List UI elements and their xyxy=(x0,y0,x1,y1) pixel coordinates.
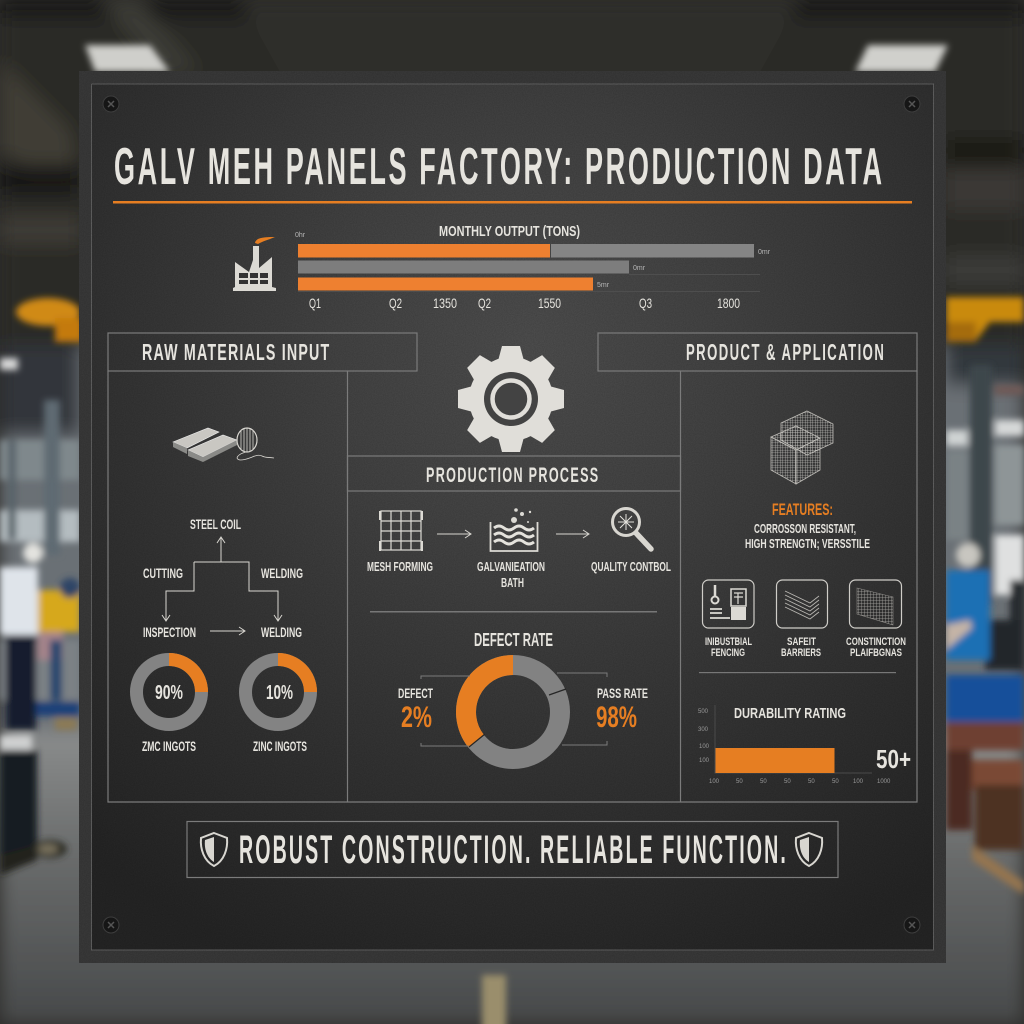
panel frames xyxy=(108,333,917,802)
axis labels: 1800 xyxy=(717,295,740,311)
divider xyxy=(699,672,896,673)
banner xyxy=(187,822,838,878)
center panel: process xyxy=(367,508,671,759)
y axis labels: 100 xyxy=(699,758,710,764)
axis labels: 1350 xyxy=(433,295,457,311)
axis labels: Q3 xyxy=(639,295,652,311)
heading: durability rating: DURABILITY RATING xyxy=(734,705,846,722)
heading: raw materials: RAW MATERIALS INPUT xyxy=(142,341,329,366)
x axis labels: 50 xyxy=(832,779,839,785)
y axis labels: 100 xyxy=(699,744,710,750)
donut: 90% xyxy=(136,660,202,724)
icon: shield right xyxy=(796,833,822,866)
y axis labels: 300 xyxy=(698,727,709,733)
label: safety barriers xyxy=(781,636,821,659)
bar 2 xyxy=(298,260,629,274)
label: construction platforms: PLAIFBGNAS xyxy=(850,647,902,659)
label: construction platforms: CONSTINCTION xyxy=(846,636,906,648)
label: welding upper: WELDING xyxy=(261,565,303,581)
label: safety barriers: SAFEIT xyxy=(787,636,816,648)
icon: mesh cubes xyxy=(771,411,833,484)
callout lines xyxy=(421,673,607,746)
icon: industrial fencing xyxy=(702,580,754,628)
icon: shield left xyxy=(201,833,227,866)
right side scene xyxy=(946,297,1024,342)
bar 3 xyxy=(298,278,593,290)
label: galvanization bath: BATH xyxy=(501,575,524,590)
x axis labels: 100 xyxy=(853,779,864,785)
tiny labels: 0hr xyxy=(295,232,306,239)
label: quality control: QUALITY CONTBOL xyxy=(591,559,671,574)
x axis labels: 100 xyxy=(709,779,720,785)
label: steel coil: STEEL COIL xyxy=(190,516,241,532)
axis labels: Q2 xyxy=(478,295,491,311)
y axis labels xyxy=(698,709,710,764)
axis labels: Q1 xyxy=(309,295,321,311)
label: galvanization bath xyxy=(477,559,545,590)
title: GALV MEH PANELS FACTORY: PRODUCTION DATA xyxy=(114,136,882,195)
axis labels xyxy=(309,295,740,311)
heading: product and application: PRODUCT & APPLICATION xyxy=(686,339,884,365)
label: industrial fencing xyxy=(705,636,752,659)
chart heading: MONTHLY OUTPUT (TONS) xyxy=(439,223,580,240)
value: 2%: 2% xyxy=(401,701,432,734)
label: industrial fencing: FENCING xyxy=(711,647,745,659)
heading: defect rate: DEFECT RATE xyxy=(474,630,553,650)
label: industrial fencing: INIBUSTBIAL xyxy=(705,636,752,648)
value: 50+: 50+ xyxy=(876,744,911,774)
label: defect: DEFECT xyxy=(398,685,433,701)
y axis labels: 500 xyxy=(698,709,709,715)
x axis labels: 1000 xyxy=(877,779,891,785)
left panel: raw materials xyxy=(136,428,310,754)
banner text: ROBUST CONSTRUCTION. RELIABLE FUNCTION. xyxy=(239,826,786,872)
value: 98%: 98% xyxy=(596,701,637,734)
icon: mesh forming xyxy=(380,511,422,551)
text: features list: CORROSSON RESISTANT, xyxy=(754,521,856,536)
divider xyxy=(370,611,657,612)
x axis labels: 50 xyxy=(808,779,815,785)
x axis labels xyxy=(709,779,891,785)
tiny labels: 0mr xyxy=(633,265,646,272)
tiny labels xyxy=(295,232,771,289)
icon: galvanization bath xyxy=(490,508,538,551)
label: zinc ingots: ZINC INGOTS xyxy=(253,738,307,754)
arrow: bath to quality xyxy=(556,533,589,535)
axis labels: 1550 xyxy=(538,295,561,311)
donut: 90%: 90% xyxy=(155,682,183,704)
bar chart: monthly output xyxy=(295,223,771,311)
label: construction platforms xyxy=(846,636,906,659)
flow connectors xyxy=(166,537,278,631)
donut: 10%: 10% xyxy=(266,682,293,704)
icon: gear xyxy=(458,346,564,452)
bar chart: durability xyxy=(715,705,872,773)
title underline xyxy=(113,201,912,204)
icon: construction platforms xyxy=(850,580,902,628)
x axis labels: 50 xyxy=(760,779,767,785)
donut: 10% xyxy=(246,660,310,724)
label: inspection: INSPECTION xyxy=(143,624,196,640)
left side scene xyxy=(16,298,80,326)
x axis labels: 50 xyxy=(784,779,791,785)
label: pass rate: PASS RATE xyxy=(597,685,648,701)
tiny labels: 0mr xyxy=(758,249,771,256)
axis labels: Q2 xyxy=(389,295,402,311)
screws xyxy=(103,96,920,933)
text: features list: HIGH STRENGTN; VERSSTILE xyxy=(745,536,870,551)
bar 1 xyxy=(298,244,754,258)
icon: safety barriers xyxy=(776,580,828,628)
heading: production process: PRODUCTION PROCESS xyxy=(426,463,598,487)
tiny labels: 5mr xyxy=(597,282,610,289)
axis lines xyxy=(298,274,760,292)
icon: factory xyxy=(233,237,276,291)
icon: magnifier xyxy=(612,508,651,549)
donut: defect rate xyxy=(466,665,566,759)
label: welding lower: WELDING xyxy=(261,624,302,640)
label: mesh forming: MESH FORMING xyxy=(367,559,433,574)
label: safety barriers: BARRIERS xyxy=(781,647,821,659)
text: features list xyxy=(745,521,870,551)
icon: steel plates and wire coil xyxy=(173,428,274,462)
x axis labels: 50 xyxy=(736,779,743,785)
metal board xyxy=(79,71,946,963)
label: galvanization bath: GALVANIEATION xyxy=(477,559,545,574)
arrow: forming to bath xyxy=(437,533,471,535)
label: zmc ingots: ZMC INGOTS xyxy=(142,738,196,754)
label: features: FEATURES: xyxy=(772,500,833,519)
right panel: product xyxy=(698,411,911,785)
label: cutting: CUTTING xyxy=(143,565,183,581)
